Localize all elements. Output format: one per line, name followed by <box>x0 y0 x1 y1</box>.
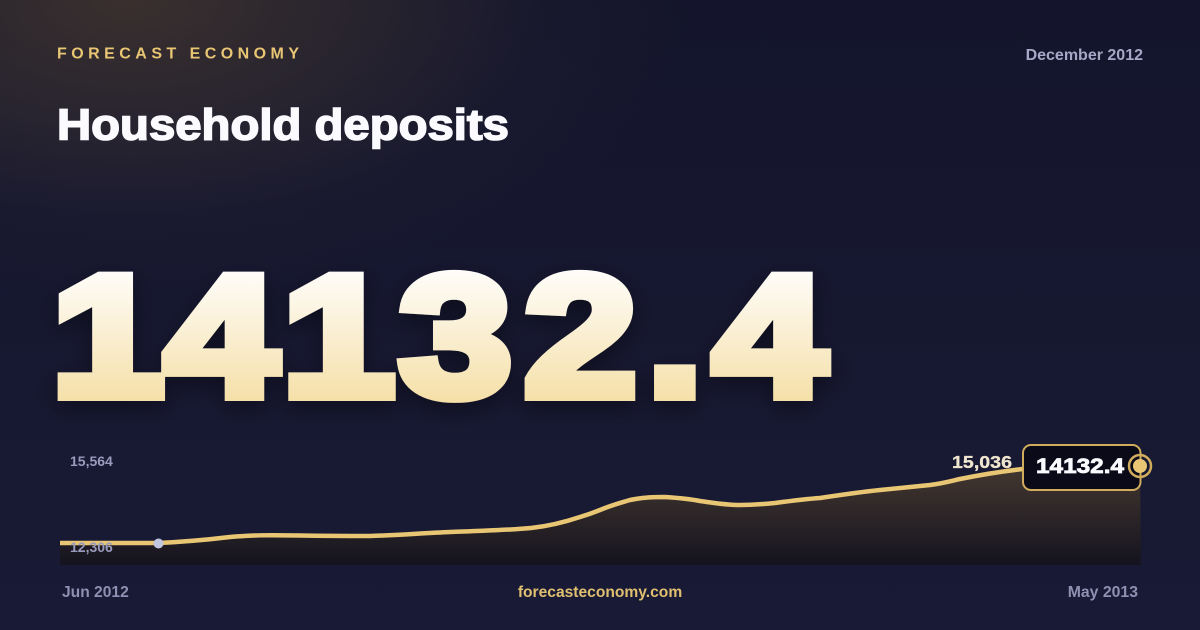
headline value: 14132.4 <box>51 240 826 432</box>
date label: December 2012 <box>1026 47 1143 64</box>
start point marker <box>154 538 164 548</box>
peak value label: 15,036 <box>952 452 1012 472</box>
axis start date: Jun 2012 <box>62 584 129 601</box>
chart line <box>60 466 1140 543</box>
eyebrow: brand name: FORECAST ECONOMY <box>57 46 299 62</box>
axis minimum label: 12,306 <box>70 539 113 555</box>
current value marker <box>1129 455 1151 477</box>
website footer: forecasteconomy.com <box>518 584 682 601</box>
current value callout: 14132.4 <box>1036 454 1124 478</box>
title: Household deposits <box>57 100 509 150</box>
current value callout <box>1023 445 1140 490</box>
chart area fill <box>60 466 1141 565</box>
axis maximum label: 15,564 <box>70 453 113 469</box>
axis end date: May 2013 <box>1068 584 1138 601</box>
line chart <box>60 445 1151 565</box>
